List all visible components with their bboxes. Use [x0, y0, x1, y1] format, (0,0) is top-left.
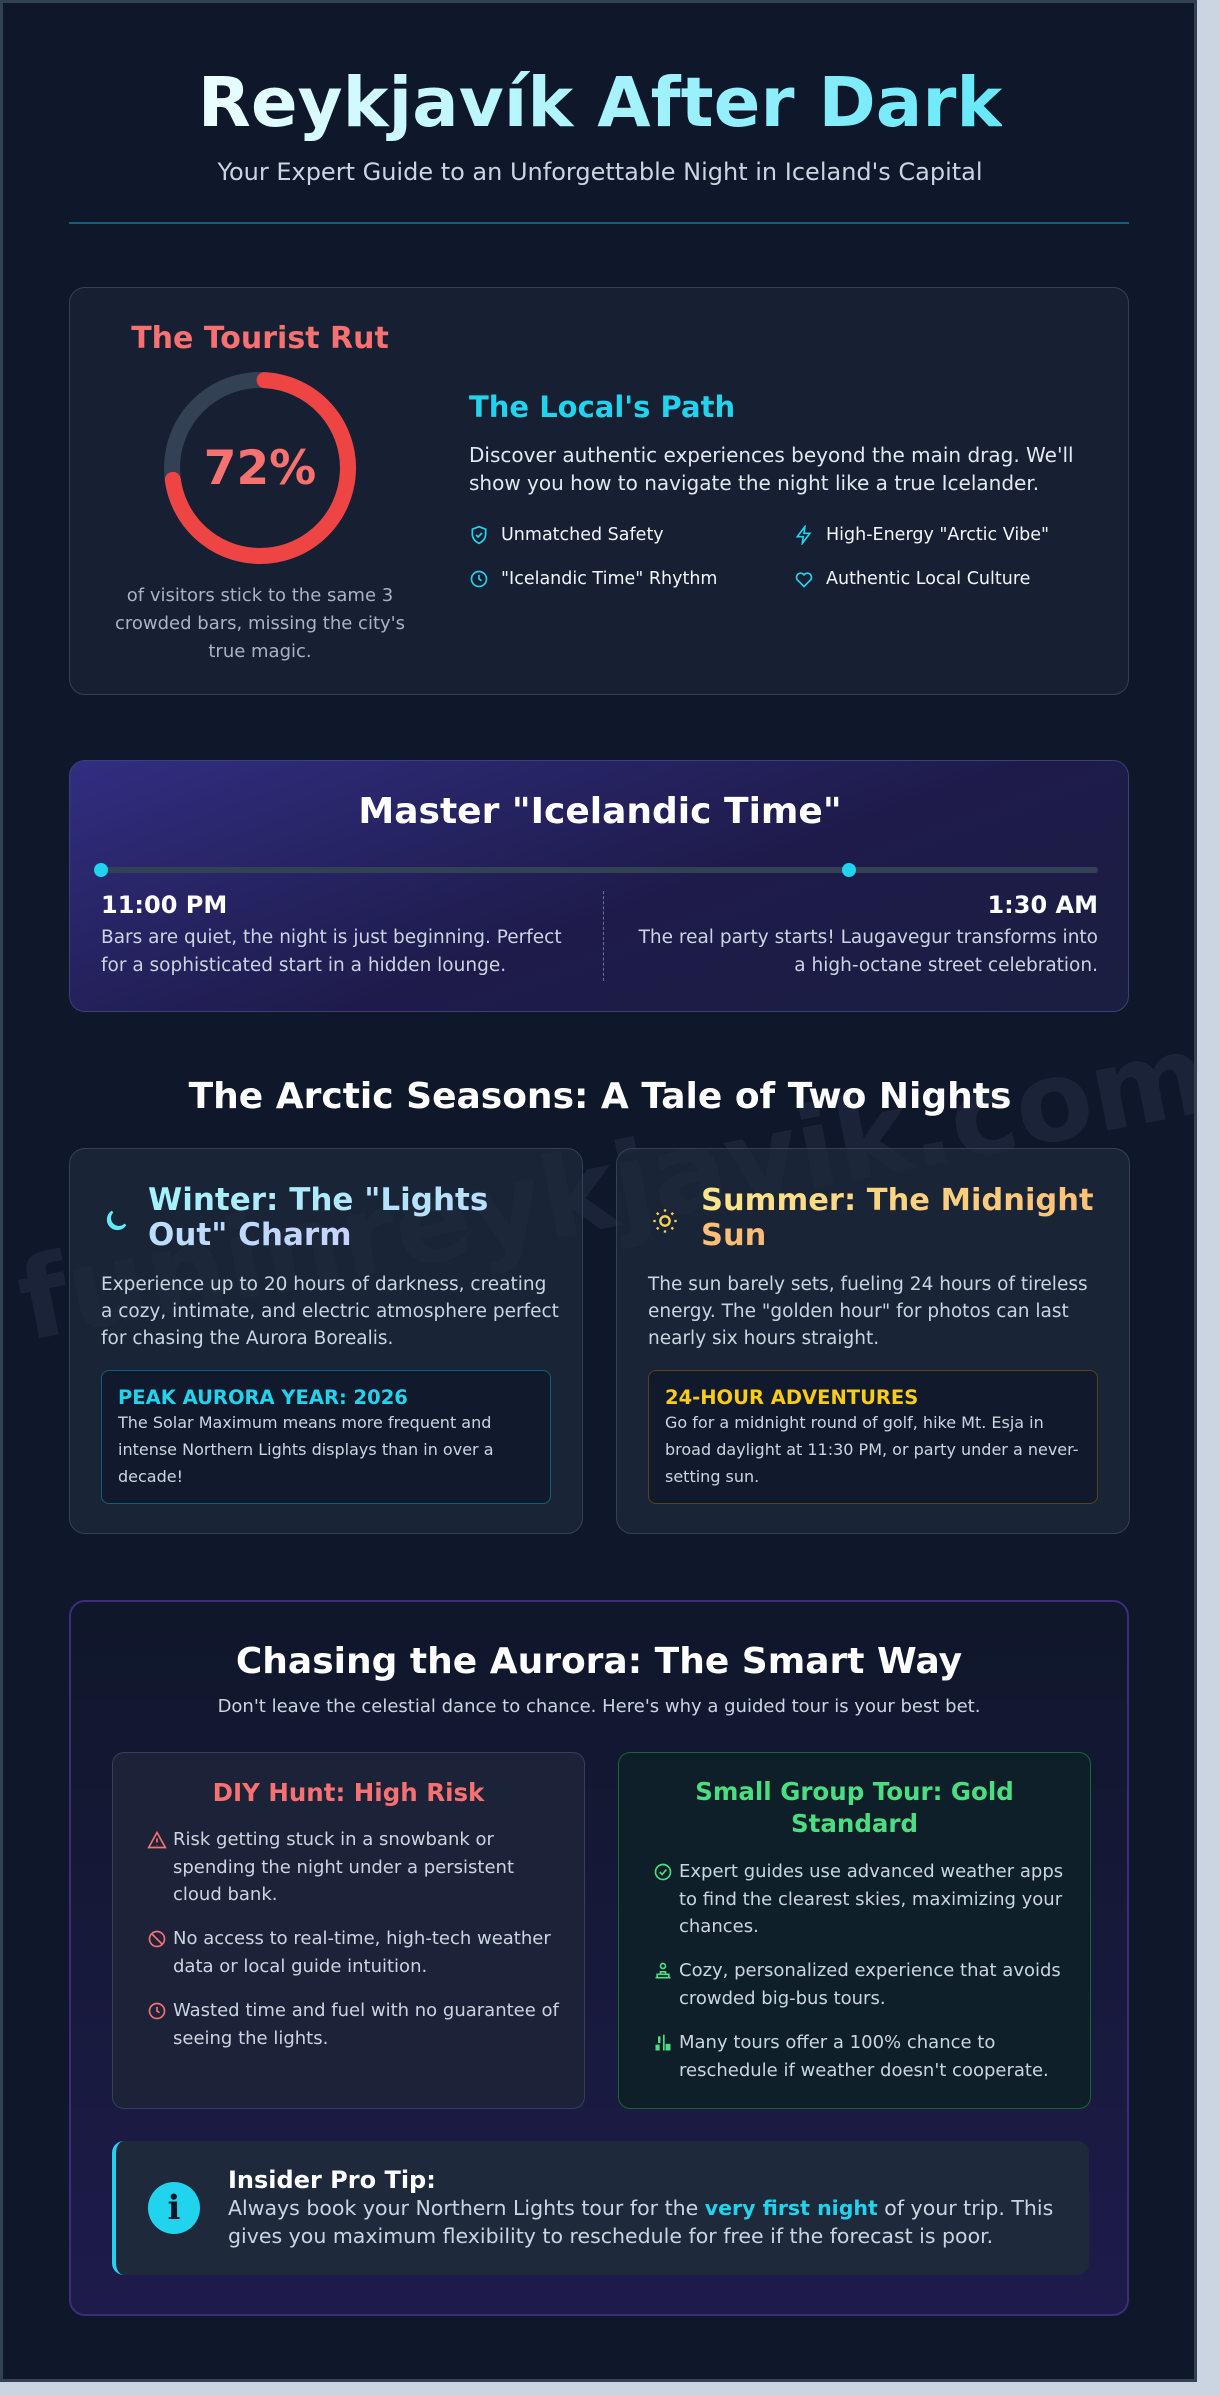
icon: moon [106, 1210, 126, 1230]
feature: icelandic time: "Icelandic Time" Rhythm [501, 569, 717, 589]
heading: Master "Icelandic Time" [358, 791, 842, 832]
callout: insider pro tip [112, 2141, 1089, 2275]
item: no access: No access to real-time, high-tech weather data or local guide intuition. [173, 1928, 551, 1976]
feature: culture: Authentic Local Culture [826, 569, 1030, 589]
item: wasted time: Wasted time and fuel with no guarantee of seeing the lights. [173, 2000, 559, 2048]
panel: master icelandic time [69, 760, 1129, 1012]
time: 11:00 PM [101, 891, 562, 976]
item: reschedule: Many tours offer a 100% chance to reschedule if weather doesn't cooperate. [679, 2032, 1049, 2080]
subtitle: Don't leave the celestial dance to chance. Here's why a guided tour is your best bet. [218, 1696, 980, 1717]
item: snowbank: Risk getting stuck in a snowbank or spending the night under a persistent cloud bank. [173, 1829, 514, 1905]
time: 11:00 PM: Bars are quiet, the night is just beginning. Perfect for a sophisticated start in a hidden lounge. [101, 927, 562, 976]
tip text [228, 2166, 1053, 2248]
panel: tourist rut vs local's path [69, 287, 1129, 695]
icon: sun [653, 1209, 677, 1233]
callout: 24-hour adventures: 24-HOUR ADVENTURES [665, 1386, 918, 1409]
donut chart: 72% [164, 372, 356, 564]
timeline track [94, 863, 1098, 877]
callout: peak aurora: The Solar Maximum means more frequent and intense Northern Lights displays than in over a decade! [118, 1413, 494, 1486]
time: 11:00 PM: 11:00 PM [101, 891, 227, 919]
card: DIY hunt [112, 1752, 585, 2109]
card: small group tour [618, 1752, 1091, 2109]
heading: Chasing the Aurora: The Smart Way [236, 1641, 962, 1682]
time: 1:30 AM [638, 891, 1098, 976]
tip text: Always book your Northern Lights tour for the very first night of your trip. This gives you maximum flexibility to reschedule for free if the forecast is poor. [228, 2196, 1053, 2248]
icon: info: i [168, 2188, 180, 2228]
heading: arctic seasons: The Arctic Seasons: A Tale of Two Nights [189, 1076, 1011, 1117]
feature: safety: Unmatched Safety [501, 525, 664, 545]
donut chart: 72%: 72% [204, 441, 316, 496]
item: expert guides: Expert guides use advanced weather apps to find the clearest skies, maximizing your chances. [679, 1861, 1063, 1937]
tip text: Insider Pro Tip: [228, 2166, 436, 2194]
caption: of visitors stick to the same 3 crowded bars, missing the city's true magic. [115, 585, 405, 662]
icon: info [148, 2182, 200, 2234]
panel: chasing the aurora [69, 1600, 1129, 2316]
heading: summer: Summer: The Midnight Sun [701, 1183, 1094, 1253]
callout: peak aurora [101, 1370, 551, 1504]
heading: tourist rut: The Tourist Rut [131, 321, 389, 356]
heading: DIY: DIY Hunt: High Risk [213, 1778, 484, 1807]
heading: winter: Winter: The "Lights Out" Charm [148, 1182, 488, 1253]
item: cozy: Cozy, personalized experience that avoids crowded big-bus tours. [679, 1960, 1061, 2008]
subtitle: Your Expert Guide to an Unforgettable Night in Iceland's Capital [217, 158, 983, 186]
time: 1:30 AM: 1:30 AM [987, 891, 1098, 919]
callout: 24-hour adventures: Go for a midnight round of golf, hike Mt. Esja in broad daylight at 11:30 PM, or party under a never-setting sun. [665, 1413, 1078, 1486]
feature: arctic vibe: High-Energy "Arctic Vibe" [826, 525, 1049, 545]
panel: winter [69, 1148, 583, 1534]
text: The sun barely sets, fueling 24 hours of tireless energy. The "golden hour" for photos can last nearly six hours straight. [648, 1274, 1088, 1349]
text: local's path description: Discover authentic experiences beyond the main drag. We'll show you how to navigate the night like a true Icelander. [469, 443, 1074, 495]
title: Reykjavík After Dark [198, 63, 1002, 143]
watermark: funinreykjavik.com [8, 1009, 1197, 1367]
time: 1:30 AM: The real party starts! Laugavegur transforms into a high-octane street celebration. [639, 927, 1098, 976]
heading: local's path: The Local's Path [469, 390, 735, 424]
callout: peak aurora: PEAK AURORA YEAR: 2026 [118, 1386, 408, 1409]
panel: summer [616, 1148, 1130, 1534]
text: Experience up to 20 hours of darkness, creating a cozy, intimate, and electric atmosphere perfect for chasing the Aurora Borealis. [101, 1274, 559, 1349]
heading: tour: Small Group Tour: Gold Standard [695, 1777, 1014, 1838]
callout: 24-hour adventures [648, 1370, 1098, 1504]
